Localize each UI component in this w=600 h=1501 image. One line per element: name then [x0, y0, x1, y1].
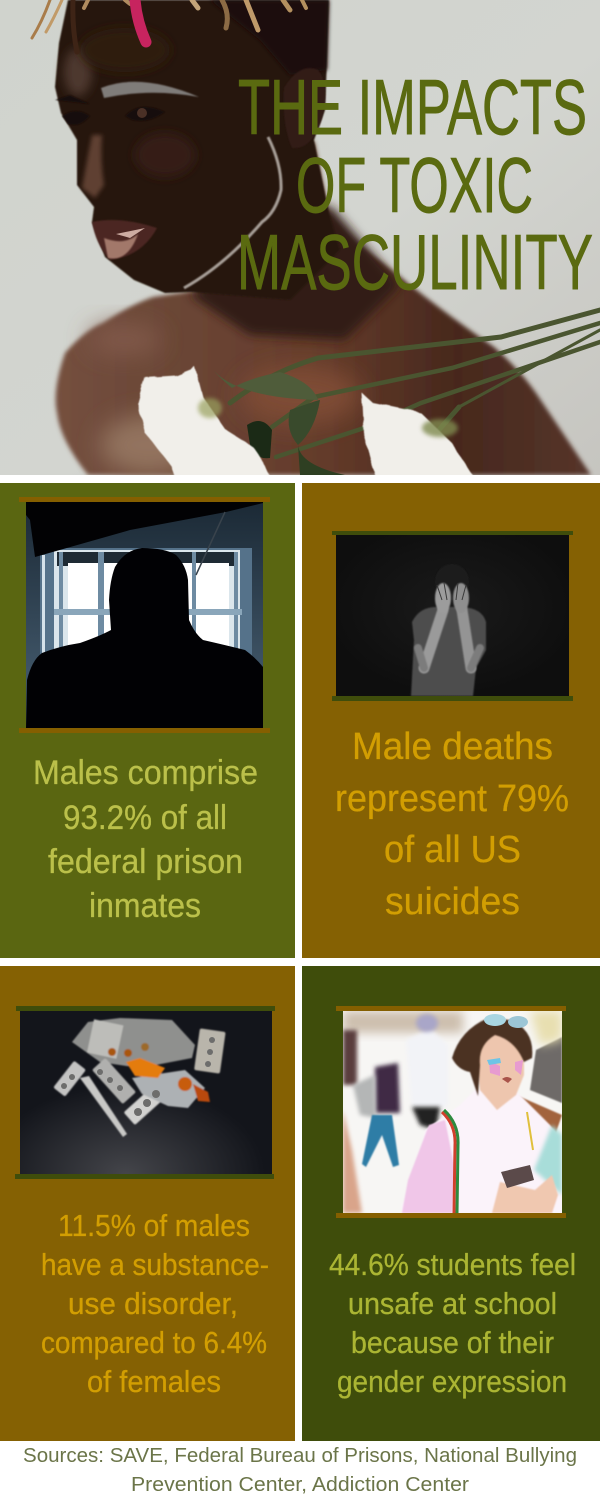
stat text [33, 754, 258, 925]
stat text: of females [87, 1364, 221, 1399]
title [237, 63, 593, 306]
panel: male suicides [302, 483, 600, 958]
stat text: gender expression [337, 1364, 567, 1399]
photo frame bars [15, 1006, 275, 1179]
stat text: have a substance- [41, 1247, 269, 1282]
photo frame bars [336, 1006, 566, 1218]
lips [92, 220, 157, 260]
face and hair [475, 1030, 524, 1110]
stat text: federal prison [48, 843, 243, 881]
sources: Prevention Center, Addiction Center [131, 1474, 469, 1496]
stat text: use disorder, [68, 1286, 238, 1321]
stat text: 93.2% of all [63, 799, 227, 837]
stat text [41, 1208, 269, 1399]
ear [284, 68, 325, 148]
stat text: 11.5% of males [58, 1208, 250, 1243]
photo frame bars [332, 531, 573, 701]
photo: man covering his face [336, 535, 569, 696]
stat text: represent 79% [335, 778, 569, 820]
hero photo: man with white flowers [0, 0, 600, 490]
photo frame bars [19, 497, 270, 733]
stat text: Male deaths [352, 726, 553, 768]
panel: students unsafe at school [302, 966, 600, 1441]
stat text: of all US [384, 829, 521, 871]
hair dreads [32, 0, 306, 52]
sources [23, 1445, 577, 1496]
stat text: suicides [385, 881, 520, 923]
stat text: unsafe at school [348, 1286, 557, 1321]
hands and phone [492, 1175, 558, 1213]
stat text: because of their [351, 1325, 554, 1360]
shirt [425, 1094, 556, 1134]
eyes [125, 107, 165, 121]
stat text: compared to 6.4% [41, 1325, 267, 1360]
sources: Sources: SAVE, Federal Bureau of Prisons, National Bullying [23, 1445, 577, 1467]
photo: student with trans flag face paint [343, 1011, 562, 1213]
flower stems and leaves [230, 310, 600, 457]
stat text [335, 726, 569, 923]
stat text: 44.6% students feel [329, 1247, 576, 1282]
panel: substance-use disorder [0, 966, 295, 1441]
panel: federal prison inmates [0, 483, 295, 958]
photo: silhouette at barred window [26, 501, 263, 728]
stat text [329, 1247, 576, 1399]
stat text: Males comprise [33, 754, 258, 792]
stat text: inmates [89, 887, 201, 925]
face paint brow and jaw line [101, 82, 199, 98]
white flowers [138, 366, 474, 475]
photo: pill blister packs and thermometer [20, 1011, 272, 1174]
